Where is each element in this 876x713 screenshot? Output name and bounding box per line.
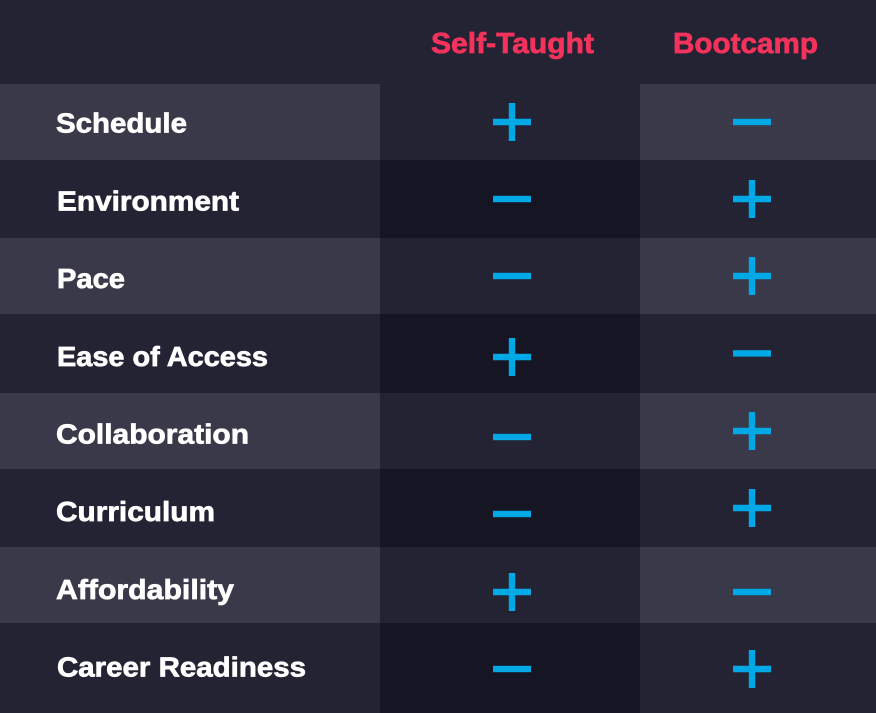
- icon: minus, Bootcamp: [733, 589, 771, 595]
- icon: minus, Self-Taught: [493, 273, 531, 279]
- icon: plus, Self-Taught: [493, 103, 531, 141]
- icon: plus, Bootcamp: [733, 650, 771, 688]
- label: Schedule: Schedule: [56, 108, 187, 138]
- label: Environment: Environment: [57, 186, 239, 216]
- row: Schedule: [0, 84, 876, 160]
- row: Curriculum: [0, 469, 876, 547]
- icon: plus, Bootcamp: [733, 412, 771, 450]
- heading: Bootcamp: Bootcamp: [673, 28, 818, 60]
- label: Affordability: Affordability: [56, 574, 234, 605]
- icon: minus, Self-Taught: [493, 511, 531, 517]
- icon: minus, Self-Taught: [493, 666, 531, 672]
- icon: minus, Self-Taught: [493, 434, 531, 440]
- row: Collaboration: [0, 393, 876, 469]
- row: Environment: [0, 160, 876, 238]
- icon: plus, Bootcamp: [733, 257, 771, 295]
- icon: plus, Self-Taught: [493, 573, 531, 611]
- icon: minus, Bootcamp: [733, 350, 771, 357]
- label: Curriculum: Curriculum: [56, 496, 215, 527]
- row: Career Readiness: [0, 623, 876, 713]
- row: Pace: [0, 238, 876, 314]
- label: Collaboration: Collaboration: [56, 418, 249, 450]
- label: Ease of Access: Ease of Access: [57, 341, 268, 372]
- icon: plus, Bootcamp: [733, 489, 771, 527]
- icon: plus, Self-Taught: [493, 338, 531, 376]
- icon: minus, Self-Taught: [493, 196, 531, 202]
- label: Career Readiness: Career Readiness: [57, 652, 306, 682]
- row: Affordability: [0, 547, 876, 623]
- row: Ease of Access: [0, 314, 876, 393]
- header band: [0, 0, 876, 84]
- icon: plus, Bootcamp: [733, 180, 771, 218]
- heading: Self-Taught: Self-Taught: [431, 28, 594, 60]
- label: Pace: Pace: [57, 263, 125, 294]
- icon: minus, Bootcamp: [733, 119, 771, 125]
